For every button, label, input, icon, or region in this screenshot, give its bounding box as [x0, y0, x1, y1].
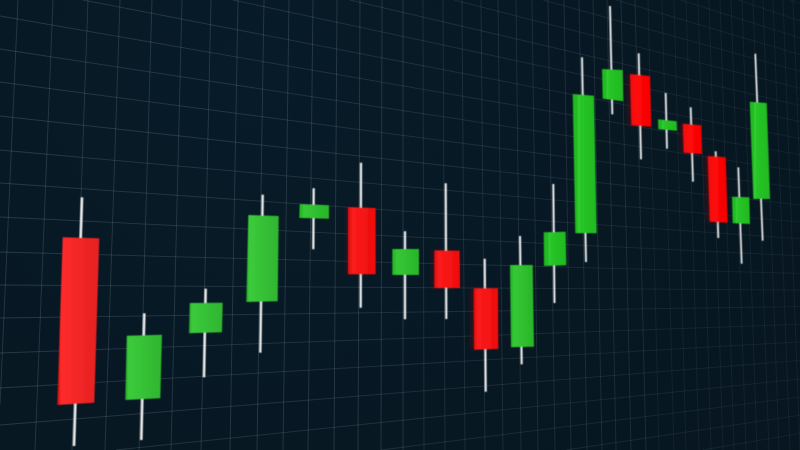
candle 12: green: [573, 57, 597, 262]
wick: [666, 93, 667, 149]
wick: [639, 53, 641, 159]
body: [683, 124, 702, 154]
wick: [520, 236, 522, 364]
wick: [582, 57, 586, 262]
candle 10: green: [510, 236, 534, 364]
body: [299, 204, 329, 219]
body: [246, 215, 279, 302]
wick: [312, 188, 315, 249]
wick: [74, 197, 82, 446]
body: [630, 74, 651, 127]
candle 2: green: [125, 313, 162, 440]
body: [708, 156, 728, 223]
motion shadow: [346, 207, 370, 274]
wick: [445, 183, 447, 319]
body: [544, 232, 566, 266]
body: [392, 249, 419, 275]
wick: [610, 6, 612, 114]
body: [573, 94, 597, 233]
motion shadow: [705, 156, 723, 223]
candle 14: red: [627, 53, 651, 159]
wick: [204, 289, 206, 377]
body: [474, 288, 498, 350]
body: [510, 265, 534, 347]
candle 17: red: [705, 151, 728, 238]
candle 5: green: [299, 188, 329, 249]
candle 3: green: [189, 289, 223, 377]
wick: [404, 231, 406, 319]
candle 7: green: [392, 231, 419, 319]
motion shadow: [680, 124, 697, 154]
motion shadow: [432, 250, 455, 288]
candle 11: green: [544, 184, 566, 303]
candle 9: red: [471, 259, 498, 392]
wick: [738, 167, 742, 264]
motion shadow: [627, 74, 645, 127]
wick: [755, 54, 763, 241]
body: [658, 119, 677, 131]
candle 8: red: [432, 183, 460, 319]
candle 6: red: [346, 163, 376, 308]
wick: [691, 107, 693, 182]
body: [750, 102, 770, 199]
wick: [141, 313, 144, 440]
body: [348, 207, 376, 274]
body: [57, 237, 99, 405]
candle 4: green: [246, 195, 279, 353]
wick: [485, 259, 486, 392]
candle 15: green: [658, 93, 677, 149]
candle 1: red: [57, 197, 99, 446]
candle 16: red: [680, 107, 702, 182]
wick: [260, 195, 263, 353]
body: [189, 303, 223, 333]
body: [434, 250, 460, 288]
candle 18: green: [732, 167, 750, 264]
wick: [360, 163, 362, 308]
body: [125, 335, 162, 400]
wick: [716, 151, 718, 238]
wick: [553, 184, 554, 303]
motion shadow: [471, 288, 492, 350]
candle 13: green: [602, 6, 623, 114]
body: [602, 69, 623, 101]
candle 19: green: [750, 54, 770, 241]
body: [732, 197, 750, 224]
